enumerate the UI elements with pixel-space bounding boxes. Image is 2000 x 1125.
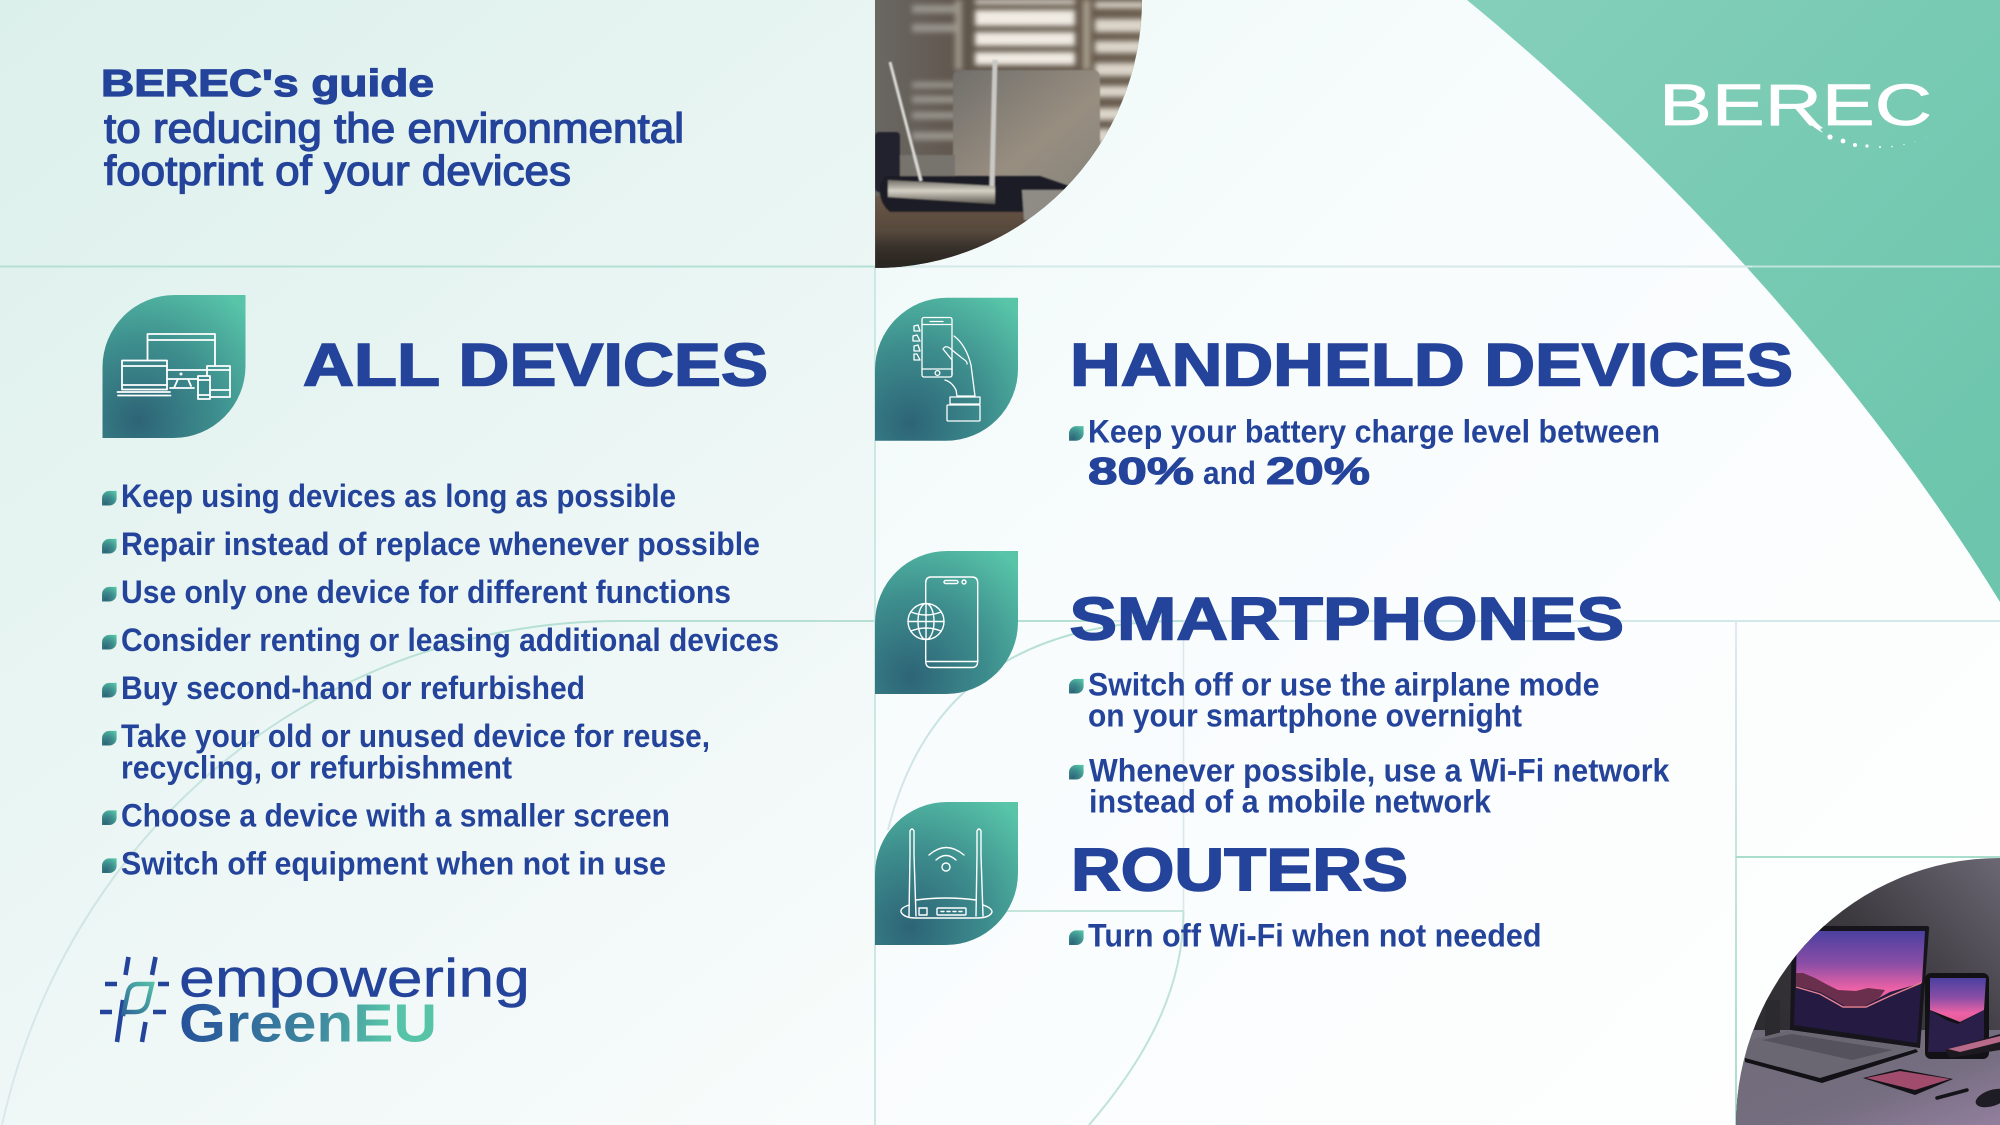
tablet — [1925, 973, 2000, 1059]
bullet: Wi-Fi off: Turn off Wi-Fi when not needed — [1088, 918, 1542, 954]
logo word: empowering: empowering — [179, 948, 530, 1008]
title — [101, 63, 684, 194]
section: routers — [875, 802, 1542, 954]
photo: laptop, tablet and phone on a table — [1736, 855, 2000, 1125]
green corner shape — [1467, 0, 2000, 602]
bullet list: all devices — [102, 478, 779, 882]
bullet list: all devices: Switch off equipment when not in use — [121, 846, 666, 882]
bullet list: all devices: Keep using devices as long as possible — [121, 478, 676, 514]
section: smartphones — [875, 551, 1670, 820]
icon: all devices — [102, 295, 246, 438]
logo: BEREC: BEREC — [1659, 73, 1932, 138]
bullet list: all devices: Consider renting or leasing additional devices — [121, 622, 779, 658]
laptop — [1745, 926, 1929, 1083]
heading: routers: ROUTERS — [1071, 836, 1408, 904]
phone on table — [1863, 1069, 1953, 1095]
icon: hand holding phone — [875, 298, 1018, 441]
title: first line: BEREC's guide — [101, 63, 434, 105]
title: third line: footprint of your devices — [104, 147, 571, 194]
bullet: airplane mode: Switch off or use the airplane mode — [1088, 666, 1600, 702]
icon: smartphone with globe — [875, 551, 1018, 694]
heading: all devices: ALL DEVICES — [303, 332, 768, 398]
bullet: battery charge level: 80% — [1088, 451, 1194, 493]
bullet: Wi-Fi network: instead of a mobile network — [1089, 784, 1491, 820]
bullet list: all devices: Choose a device with a smaller screen — [121, 798, 670, 834]
title: second line: to reducing the environmental — [104, 104, 684, 152]
bullet: airplane mode — [1069, 666, 1600, 734]
bullet: Wi-Fi network — [1069, 752, 1670, 820]
logo word: GreenEU: GreenEU — [179, 994, 437, 1054]
background: left panel — [0, 0, 875, 1125]
heading: smartphones: SMARTPHONES — [1070, 586, 1624, 652]
bullet list: all devices: Use only one device for different functions — [121, 574, 731, 610]
bullet list: all devices: Take your old or unused device for reuse, — [121, 718, 710, 754]
logo: empowering GreenEU — [100, 948, 530, 1054]
section: handheld devices — [875, 298, 1793, 493]
bullet: battery charge level: Keep your battery charge level between — [1088, 414, 1660, 450]
bullet: airplane mode: on your smartphone overnight — [1088, 698, 1522, 734]
bullet list: all devices: Buy second-hand or refurbished — [121, 670, 585, 706]
bullet list: all devices: Repair instead of replace whenever possible — [121, 526, 760, 562]
bullet: battery charge level: and — [1203, 455, 1256, 491]
logo mark — [100, 957, 169, 1042]
bullet: battery charge level — [1069, 414, 1660, 493]
section: all devices — [102, 295, 779, 882]
background: right panel — [875, 0, 2000, 1125]
logo: BEREC — [1659, 73, 1932, 148]
bullet list: all devices: recycling, or refurbishment — [121, 750, 512, 786]
bullet: Wi-Fi network: Whenever possible, use a Wi-Fi network — [1089, 752, 1670, 788]
heading: handheld devices: HANDHELD DEVICES — [1070, 332, 1793, 398]
icon: router — [875, 802, 1018, 945]
photo: desk with laptop and pens — [875, 0, 1145, 270]
bullet: battery charge level: 20% — [1266, 451, 1370, 493]
